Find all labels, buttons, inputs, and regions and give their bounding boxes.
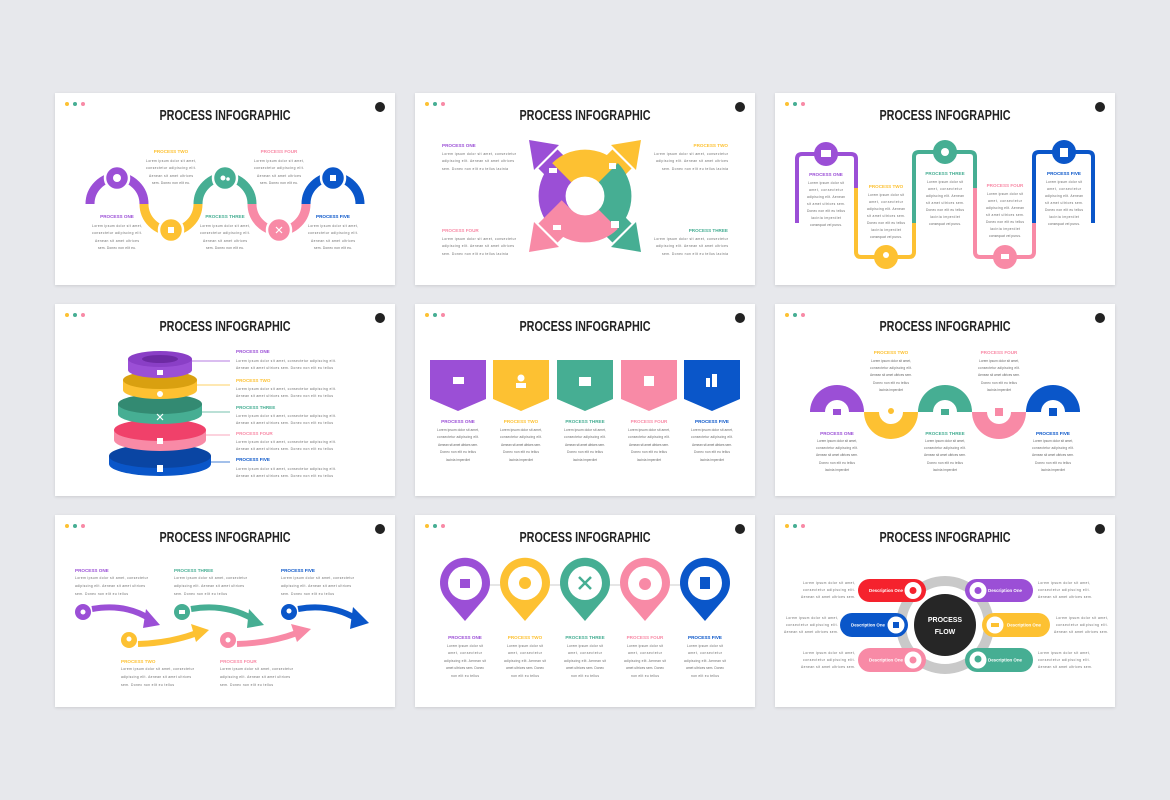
text blocks: PROCESS ONE: [100, 214, 134, 219]
text blocks: Aenean sit amet ultrices sem.: [629, 443, 669, 447]
text blocks: amet, consectetur: [628, 651, 663, 655]
text blocks: Lorem ipsum dolor sit amet,: [146, 159, 196, 163]
title: PROCESS INFOGRAPHIC: [160, 319, 291, 335]
text blocks: PROCESS FOUR: [220, 659, 257, 664]
slide 2: circular arrows: sem. Donec non elit eu tellus lacinia: [442, 252, 508, 256]
text blocks: sem. Donec non elit eu tellus: [121, 683, 174, 687]
text blocks: PROCESS THREE: [236, 405, 275, 410]
text blocks: PROCESS FIVE: [695, 419, 729, 424]
text blocks: Lorem ipsum dolor sit amet,: [691, 428, 733, 432]
text blocks: lacinia imperdiet: [825, 468, 849, 472]
text blocks: Donec non elit eu tellus: [440, 450, 476, 454]
text blocks: PROCESS THREE: [925, 171, 965, 176]
text blocks: sem. Donec non elit eu tellus: [174, 592, 227, 596]
text blocks: Aenean sit amet ultrices sem. Donec non elit eu tellus: [236, 394, 333, 398]
text blocks: Aenean sit amet ultrices sem. Donec non elit eu tellus: [236, 366, 333, 370]
text blocks: amet ultrices sem. Donec: [566, 666, 604, 670]
text blocks: Lorem ipsum dolor sit amet, consectetur adipiscing elit.: [236, 359, 336, 363]
text blocks: PROCESS TWO: [874, 350, 909, 355]
text blocks: PROCESS TWO: [508, 635, 543, 640]
text blocks: Lorem ipsum dolor sit amet,: [564, 428, 606, 432]
side text blocks: consectetur adipiscing elit.: [1038, 658, 1090, 662]
text blocks: Lorem ipsum dolor sit amet,: [1033, 439, 1073, 443]
title: PROCESS INFOGRAPHIC: [160, 530, 291, 546]
slide 6: half circles: [775, 304, 1115, 496]
text blocks: Lorem ipsum dolor sit amet, consectetur adipiscing elit.: [236, 440, 336, 444]
text blocks: Donec non elit eu tellus: [927, 461, 963, 465]
text blocks: Lorem ipsum dolor sit amet,: [925, 439, 965, 443]
text blocks: Donec non elit eu tellus: [694, 450, 730, 454]
text blocks: Lorem ipsum dolor sit amet,: [628, 428, 670, 432]
text blocks: consequat vel purus.: [810, 223, 842, 227]
title: PROCESS INFOGRAPHIC: [880, 530, 1011, 546]
title: PROCESS INFOGRAPHIC: [160, 108, 291, 124]
text blocks: PROCESS THREE: [565, 635, 605, 640]
text blocks: sit amet ultrices sem.: [986, 213, 1024, 217]
text blocks: lacinia imperdiet: [446, 458, 470, 462]
text blocks: Aenean sit amet ultrices sem. Donec non elit eu tellus: [236, 447, 333, 451]
side text blocks: consectetur adipiscing elit.: [803, 658, 855, 662]
text blocks: PROCESS TWO: [121, 659, 156, 664]
text blocks: PROCESS FOUR: [261, 149, 298, 154]
text blocks: Lorem ipsum dolor sit: [627, 644, 663, 648]
side text blocks: Aenean sit amet ultrices sem.: [1054, 630, 1108, 634]
text blocks: sem. Donec non elit eu.: [260, 181, 298, 185]
text blocks: [437, 419, 733, 462]
text blocks: Lorem ipsum dolor sit amet,: [308, 224, 358, 228]
text blocks: PROCESS THREE: [925, 431, 965, 436]
text blocks: adipiscing elit. Aenean sit amet ultrices: [174, 584, 244, 588]
title: PROCESS INFOGRAPHIC: [520, 530, 651, 546]
text blocks: PROCESS FIVE: [1047, 171, 1081, 176]
title: PROCESS INFOGRAPHIC: [520, 108, 651, 124]
text blocks: lacinia imperdiet: [509, 458, 533, 462]
hub diagram: Description One: [988, 658, 1023, 662]
text blocks: adipiscing elit. Aenean sit: [684, 659, 726, 663]
text blocks: consectetur adipiscing elit.: [146, 166, 196, 170]
slide 2: circular arrows: Lorem ipsum dolor sit amet, consectetur: [442, 152, 517, 156]
text blocks: lacinia imperdiet: [811, 216, 841, 220]
text blocks: PROCESS FOUR: [987, 183, 1024, 188]
text blocks: consectetur adipiscing elit.: [437, 435, 479, 439]
text blocks: PROCESS FOUR: [981, 350, 1018, 355]
text blocks: Aenean sit amet ultrices sem.: [692, 443, 732, 447]
text blocks: amet, consectetur: [988, 199, 1023, 203]
text blocks: PROCESS FIVE: [688, 635, 722, 640]
text blocks: Lorem ipsum dolor sit: [687, 644, 723, 648]
text blocks: sit amet ultrices sem.: [926, 201, 964, 205]
text blocks: lacinia imperdiet: [990, 227, 1020, 231]
text blocks: amet, consectetur: [688, 651, 723, 655]
side text blocks: Aenean sit amet ultrices sem.: [1038, 665, 1092, 669]
slide 2: circular arrows: [415, 93, 755, 285]
text blocks: lacinia imperdiet: [933, 468, 957, 472]
arrows chart: [75, 604, 369, 648]
text blocks: Aenean sit amet ultrices sem. Donec non elit eu tellus: [236, 474, 333, 478]
text blocks: non elit eu tellus: [631, 674, 659, 678]
side text blocks: [784, 581, 1108, 669]
text blocks: Lorem ipsum dolor sit amet, consectetur adipiscing elit.: [236, 414, 336, 418]
text blocks: adipiscing elit. Aenean: [986, 206, 1024, 210]
side text blocks: consectetur adipiscing elit.: [1038, 588, 1090, 592]
text blocks: consectetur adipiscing elit.: [308, 231, 358, 235]
hub diagram: Description One: [869, 658, 904, 662]
text blocks: PROCESS FOUR: [236, 431, 273, 436]
slide 2: circular arrows: adipiscing elit. Aenean sit amet ultrices: [442, 159, 514, 163]
text blocks: consectetur adipiscing elit.: [924, 446, 966, 450]
slide 4: stacked cylinders: [55, 304, 395, 496]
text blocks: PROCESS THREE: [205, 214, 245, 219]
text blocks: adipiscing elit. Aenean: [807, 195, 845, 199]
text blocks: Lorem ipsum dolor sit amet,: [817, 439, 857, 443]
text blocks: sem. Donec non elit eu tellus: [220, 683, 273, 687]
side text blocks: Aenean sit amet ultrices sem.: [784, 630, 838, 634]
text blocks: PROCESS ONE: [236, 349, 270, 354]
text blocks: adipiscing elit. Aenean sit: [444, 659, 486, 663]
text blocks: amet, consectetur: [448, 651, 483, 655]
slide 3: bracket columns: [775, 93, 1115, 285]
hub diagram: Description One: [869, 588, 904, 593]
side text blocks: Lorem ipsum dolor sit amet,: [786, 616, 838, 620]
slide 2: circular arrows: Lorem ipsum dolor sit amet, consectetur: [654, 152, 729, 156]
text blocks: adipiscing elit. Aenean: [1045, 194, 1083, 198]
text blocks: consectetur adipiscing elit.: [978, 366, 1020, 370]
text blocks: Lorem ipsum dolor sit amet, consectetur: [220, 667, 294, 671]
text blocks: consectetur adipiscing elit.: [564, 435, 606, 439]
text blocks: amet, consectetur: [568, 651, 603, 655]
text blocks: Aenean sit amet ultrices: [203, 239, 247, 243]
text blocks: Aenean sit amet ultrices sem.: [870, 373, 912, 377]
slide 5: banner tabs: [415, 304, 755, 496]
text blocks: PROCESS TWO: [504, 419, 539, 424]
text blocks: PROCESS FOUR: [627, 635, 664, 640]
text blocks: adipiscing elit. Aenean: [926, 194, 964, 198]
text blocks: Aenean sit amet ultrices sem.: [1032, 453, 1074, 457]
text blocks: PROCESS TWO: [869, 184, 904, 189]
text blocks: amet, consectetur: [928, 187, 963, 191]
text blocks: sem. Donec non elit eu tellus: [75, 592, 128, 596]
slide 2: circular arrows: adipiscing elit. Aenean sit amet ultrices: [442, 244, 514, 248]
text blocks: consequat vel purus.: [989, 234, 1021, 238]
text blocks: Lorem ipsum dolor sit amet, consectetur: [281, 576, 355, 580]
side text blocks: Lorem ipsum dolor sit amet,: [1056, 616, 1108, 620]
cylinder stack: [109, 351, 211, 476]
text blocks: Lorem ipsum dolor sit: [927, 180, 963, 184]
text blocks: Lorem ipsum dolor sit amet,: [92, 224, 142, 228]
side text blocks: Lorem ipsum dolor sit amet,: [1038, 581, 1090, 585]
text blocks: Donec non elit eu tellus: [631, 450, 667, 454]
side text blocks: Lorem ipsum dolor sit amet,: [803, 651, 855, 655]
text blocks: amet, consectetur: [869, 200, 904, 204]
hub diagram: Description One: [1007, 622, 1042, 628]
text blocks: Aenean sit amet ultrices: [95, 239, 139, 243]
text blocks: adipiscing elit. Aenean sit: [564, 659, 606, 663]
hub diagram: FLOW: [935, 629, 956, 636]
text blocks: Lorem ipsum dolor sit amet,: [500, 428, 542, 432]
text blocks: Donec non elit eu tellus: [873, 381, 909, 385]
text blocks: Lorem ipsum dolor sit amet,: [871, 359, 911, 363]
slide 2: circular arrows: PROCESS FOUR: [442, 228, 479, 233]
text blocks: consectetur adipiscing elit.: [500, 435, 542, 439]
text blocks: Donec non elit eu tellus: [867, 221, 905, 225]
text blocks: sem. Donec non elit eu.: [206, 246, 244, 250]
text blocks: sem. Donec non elit eu.: [152, 181, 190, 185]
text blocks: Aenean sit amet ultrices sem.: [438, 443, 478, 447]
text blocks: PROCESS ONE: [75, 568, 109, 573]
text blocks: lacinia imperdiet: [871, 228, 901, 232]
text blocks: sit amet ultrices sem.: [1045, 201, 1083, 205]
text blocks: Lorem ipsum dolor sit amet,: [979, 359, 1019, 363]
text blocks: [236, 349, 336, 478]
slide 8: location pins: [415, 515, 755, 707]
text blocks: Lorem ipsum dolor sit: [808, 181, 844, 185]
text blocks: lacinia imperdiet: [987, 388, 1011, 392]
text blocks: Aenean sit amet ultrices: [149, 174, 193, 178]
text blocks: Donec non elit eu tellus: [503, 450, 539, 454]
text blocks: Lorem ipsum dolor sit amet, consectetur: [174, 576, 248, 580]
text blocks: consectetur adipiscing elit.: [870, 366, 912, 370]
side text blocks: Aenean sit amet ultrices sem.: [801, 595, 855, 599]
text blocks: PROCESS ONE: [442, 143, 476, 148]
slide 2: circular arrows: sem. Donec non elit eu tellus lacinia: [662, 167, 728, 171]
hub diagram: [840, 579, 1050, 672]
text blocks: adipiscing elit. Aenean sit amet ultrices: [220, 675, 290, 679]
text blocks: PROCESS FIVE: [1036, 431, 1070, 436]
text blocks: Donec non elit eu tellus: [981, 381, 1017, 385]
text blocks: Donec non elit eu tellus: [819, 461, 855, 465]
slide 1: wave process: [55, 93, 395, 285]
text blocks: Aenean sit amet ultrices sem.: [816, 453, 858, 457]
text blocks: Lorem ipsum dolor sit amet,: [254, 159, 304, 163]
text blocks: Aenean sit amet ultrices sem. Donec non elit eu tellus: [236, 421, 333, 425]
text blocks: Lorem ipsum dolor sit: [868, 193, 904, 197]
text blocks: PROCESS ONE: [448, 635, 482, 640]
text blocks: adipiscing elit. Aenean sit amet ultrices: [121, 675, 191, 679]
pins chart: [440, 558, 730, 621]
text blocks: PROCESS TWO: [154, 149, 189, 154]
text blocks: amet, consectetur: [508, 651, 543, 655]
text blocks: PROCESS ONE: [820, 431, 854, 436]
banner shapes: [430, 360, 740, 411]
text blocks: PROCESS FIVE: [236, 457, 270, 462]
text blocks: adipiscing elit. Aenean sit: [504, 659, 546, 663]
text blocks: consequat vel purus.: [870, 235, 902, 239]
slide 2: circular arrows: Lorem ipsum dolor sit amet, consectetur: [654, 237, 729, 241]
text blocks: Donec non elit eu tellus: [1045, 208, 1083, 212]
text blocks: consectetur adipiscing elit.: [254, 166, 304, 170]
text blocks: Aenean sit amet ultrices sem.: [501, 443, 541, 447]
text blocks: PROCESS TWO: [236, 378, 271, 383]
text blocks: lacinia imperdiet: [1049, 215, 1079, 219]
text blocks: [807, 171, 1083, 239]
text blocks: non elit eu tellus: [691, 674, 719, 678]
text blocks: amet, consectetur: [1047, 187, 1082, 191]
text blocks: sem. Donec non elit eu.: [98, 246, 136, 250]
text blocks: Aenean sit amet ultrices: [257, 174, 301, 178]
title: PROCESS INFOGRAPHIC: [880, 108, 1011, 124]
text blocks: consequat vel purus.: [929, 222, 961, 226]
text blocks: Aenean sit amet ultrices sem.: [565, 443, 605, 447]
text blocks: Lorem ipsum dolor sit: [1046, 180, 1082, 184]
text blocks: Donec non elit eu tellus: [926, 208, 964, 212]
side text blocks: Aenean sit amet ultrices sem.: [801, 665, 855, 669]
text blocks: Lorem ipsum dolor sit amet, consectetur adipiscing elit.: [236, 387, 336, 391]
text blocks: Donec non elit eu tellus: [807, 209, 845, 213]
text blocks: PROCESS THREE: [565, 419, 605, 424]
text blocks: adipiscing elit. Aenean: [867, 207, 905, 211]
text blocks: Donec non elit eu tellus: [1035, 461, 1071, 465]
text blocks: Donec non elit eu tellus: [986, 220, 1024, 224]
side text blocks: consectetur adipiscing elit.: [1056, 623, 1108, 627]
text blocks: adipiscing elit. Aenean sit amet ultrices: [75, 584, 145, 588]
text blocks: amet ultrices sem. Donec: [626, 666, 664, 670]
text blocks: adipiscing elit. Aenean sit: [624, 659, 666, 663]
hub diagram: Description One: [988, 588, 1023, 593]
text blocks: amet ultrices sem. Donec: [446, 666, 484, 670]
text blocks: Aenean sit amet ultrices: [311, 239, 355, 243]
text blocks: amet ultrices sem. Donec: [506, 666, 544, 670]
text blocks: lacinia imperdiet: [930, 215, 960, 219]
text blocks: amet, consectetur: [809, 188, 844, 192]
text blocks: amet ultrices sem. Donec: [686, 666, 724, 670]
text blocks: consectetur adipiscing elit.: [691, 435, 733, 439]
text blocks: PROCESS FOUR: [631, 419, 668, 424]
text blocks: lacinia imperdiet: [637, 458, 661, 462]
text blocks: PROCESS ONE: [809, 172, 843, 177]
text blocks: consectetur adipiscing elit.: [92, 231, 142, 235]
text blocks: Lorem ipsum dolor sit amet,: [437, 428, 479, 432]
text blocks: consectetur adipiscing elit.: [200, 231, 250, 235]
side text blocks: Lorem ipsum dolor sit amet,: [803, 581, 855, 585]
text blocks: sem. Donec non elit eu.: [314, 246, 352, 250]
hub diagram: Description One: [851, 622, 886, 628]
text blocks: non elit eu tellus: [451, 674, 479, 678]
side text blocks: Lorem ipsum dolor sit amet,: [1038, 651, 1090, 655]
text blocks: sit amet ultrices sem.: [807, 202, 845, 206]
text blocks: non elit eu tellus: [571, 674, 599, 678]
text blocks: PROCESS FIVE: [281, 568, 315, 573]
text blocks: [816, 350, 1074, 472]
text blocks: lacinia imperdiet: [1041, 468, 1065, 472]
text blocks: Lorem ipsum dolor sit: [507, 644, 543, 648]
half circle chart: [810, 385, 1080, 439]
text blocks: Lorem ipsum dolor sit amet, consectetur adipiscing elit.: [236, 467, 336, 471]
text blocks: Donec non elit eu tellus: [567, 450, 603, 454]
text blocks: consequat vel purus.: [1048, 222, 1080, 226]
text blocks: Lorem ipsum dolor sit amet, consectetur: [75, 576, 149, 580]
slide 2: circular arrows: PROCESS TWO: [694, 143, 728, 148]
text blocks: consectetur adipiscing elit.: [628, 435, 670, 439]
hub diagram: PROCESS: [928, 617, 962, 624]
text blocks: Aenean sit amet ultrices sem.: [924, 453, 966, 457]
text blocks: lacinia imperdiet: [573, 458, 597, 462]
slide 7: curved arrows: [55, 515, 395, 707]
text blocks: consectetur adipiscing elit.: [816, 446, 858, 450]
text blocks: lacinia imperdiet: [700, 458, 724, 462]
text blocks: Lorem ipsum dolor sit: [567, 644, 603, 648]
slide 2: circular arrows: adipiscing elit. Aenean sit amet ultrices: [656, 159, 728, 163]
text blocks: Lorem ipsum dolor sit amet, consectetur: [121, 667, 195, 671]
side text blocks: consectetur adipiscing elit.: [803, 588, 855, 592]
text blocks: non elit eu tellus: [511, 674, 539, 678]
slide 2: circular arrows: sem. Donec non elit eu tellus lacinia: [442, 167, 508, 171]
connector lines: [192, 361, 230, 462]
wave chart: [90, 166, 360, 242]
text blocks: Lorem ipsum dolor sit: [447, 644, 483, 648]
text blocks: sit amet ultrices sem.: [867, 214, 905, 218]
text blocks: sem. Donec non elit eu tellus: [281, 592, 334, 596]
slide 2: circular arrows: Lorem ipsum dolor sit amet, consectetur: [442, 237, 517, 241]
text blocks: [92, 149, 358, 250]
slide 2: circular arrows: sem. Donec non elit eu tellus lacinia: [662, 252, 728, 256]
slide 2: circular arrows: PROCESS THREE: [689, 228, 728, 233]
slide 9: process flow hub: [775, 515, 1115, 707]
bracket chart: [797, 152, 1093, 257]
text blocks: consectetur adipiscing elit.: [1032, 446, 1074, 450]
text blocks: Lorem ipsum dolor sit amet,: [200, 224, 250, 228]
text blocks: adipiscing elit. Aenean sit amet ultrices: [281, 584, 351, 588]
text blocks: [444, 635, 726, 678]
side text blocks: Aenean sit amet ultrices sem.: [1038, 595, 1092, 599]
text blocks: PROCESS FIVE: [316, 214, 350, 219]
ring arrows chart: [529, 140, 641, 252]
text blocks: [75, 568, 355, 687]
text blocks: PROCESS ONE: [441, 419, 475, 424]
text blocks: Aenean sit amet ultrices sem.: [978, 373, 1020, 377]
side text blocks: consectetur adipiscing elit.: [786, 623, 838, 627]
title: PROCESS INFOGRAPHIC: [520, 319, 651, 335]
text blocks: Lorem ipsum dolor sit: [987, 192, 1023, 196]
text blocks: lacinia imperdiet: [879, 388, 903, 392]
text blocks: PROCESS THREE: [174, 568, 213, 573]
slide 2: circular arrows: adipiscing elit. Aenean sit amet ultrices: [656, 244, 728, 248]
title: PROCESS INFOGRAPHIC: [880, 319, 1011, 335]
